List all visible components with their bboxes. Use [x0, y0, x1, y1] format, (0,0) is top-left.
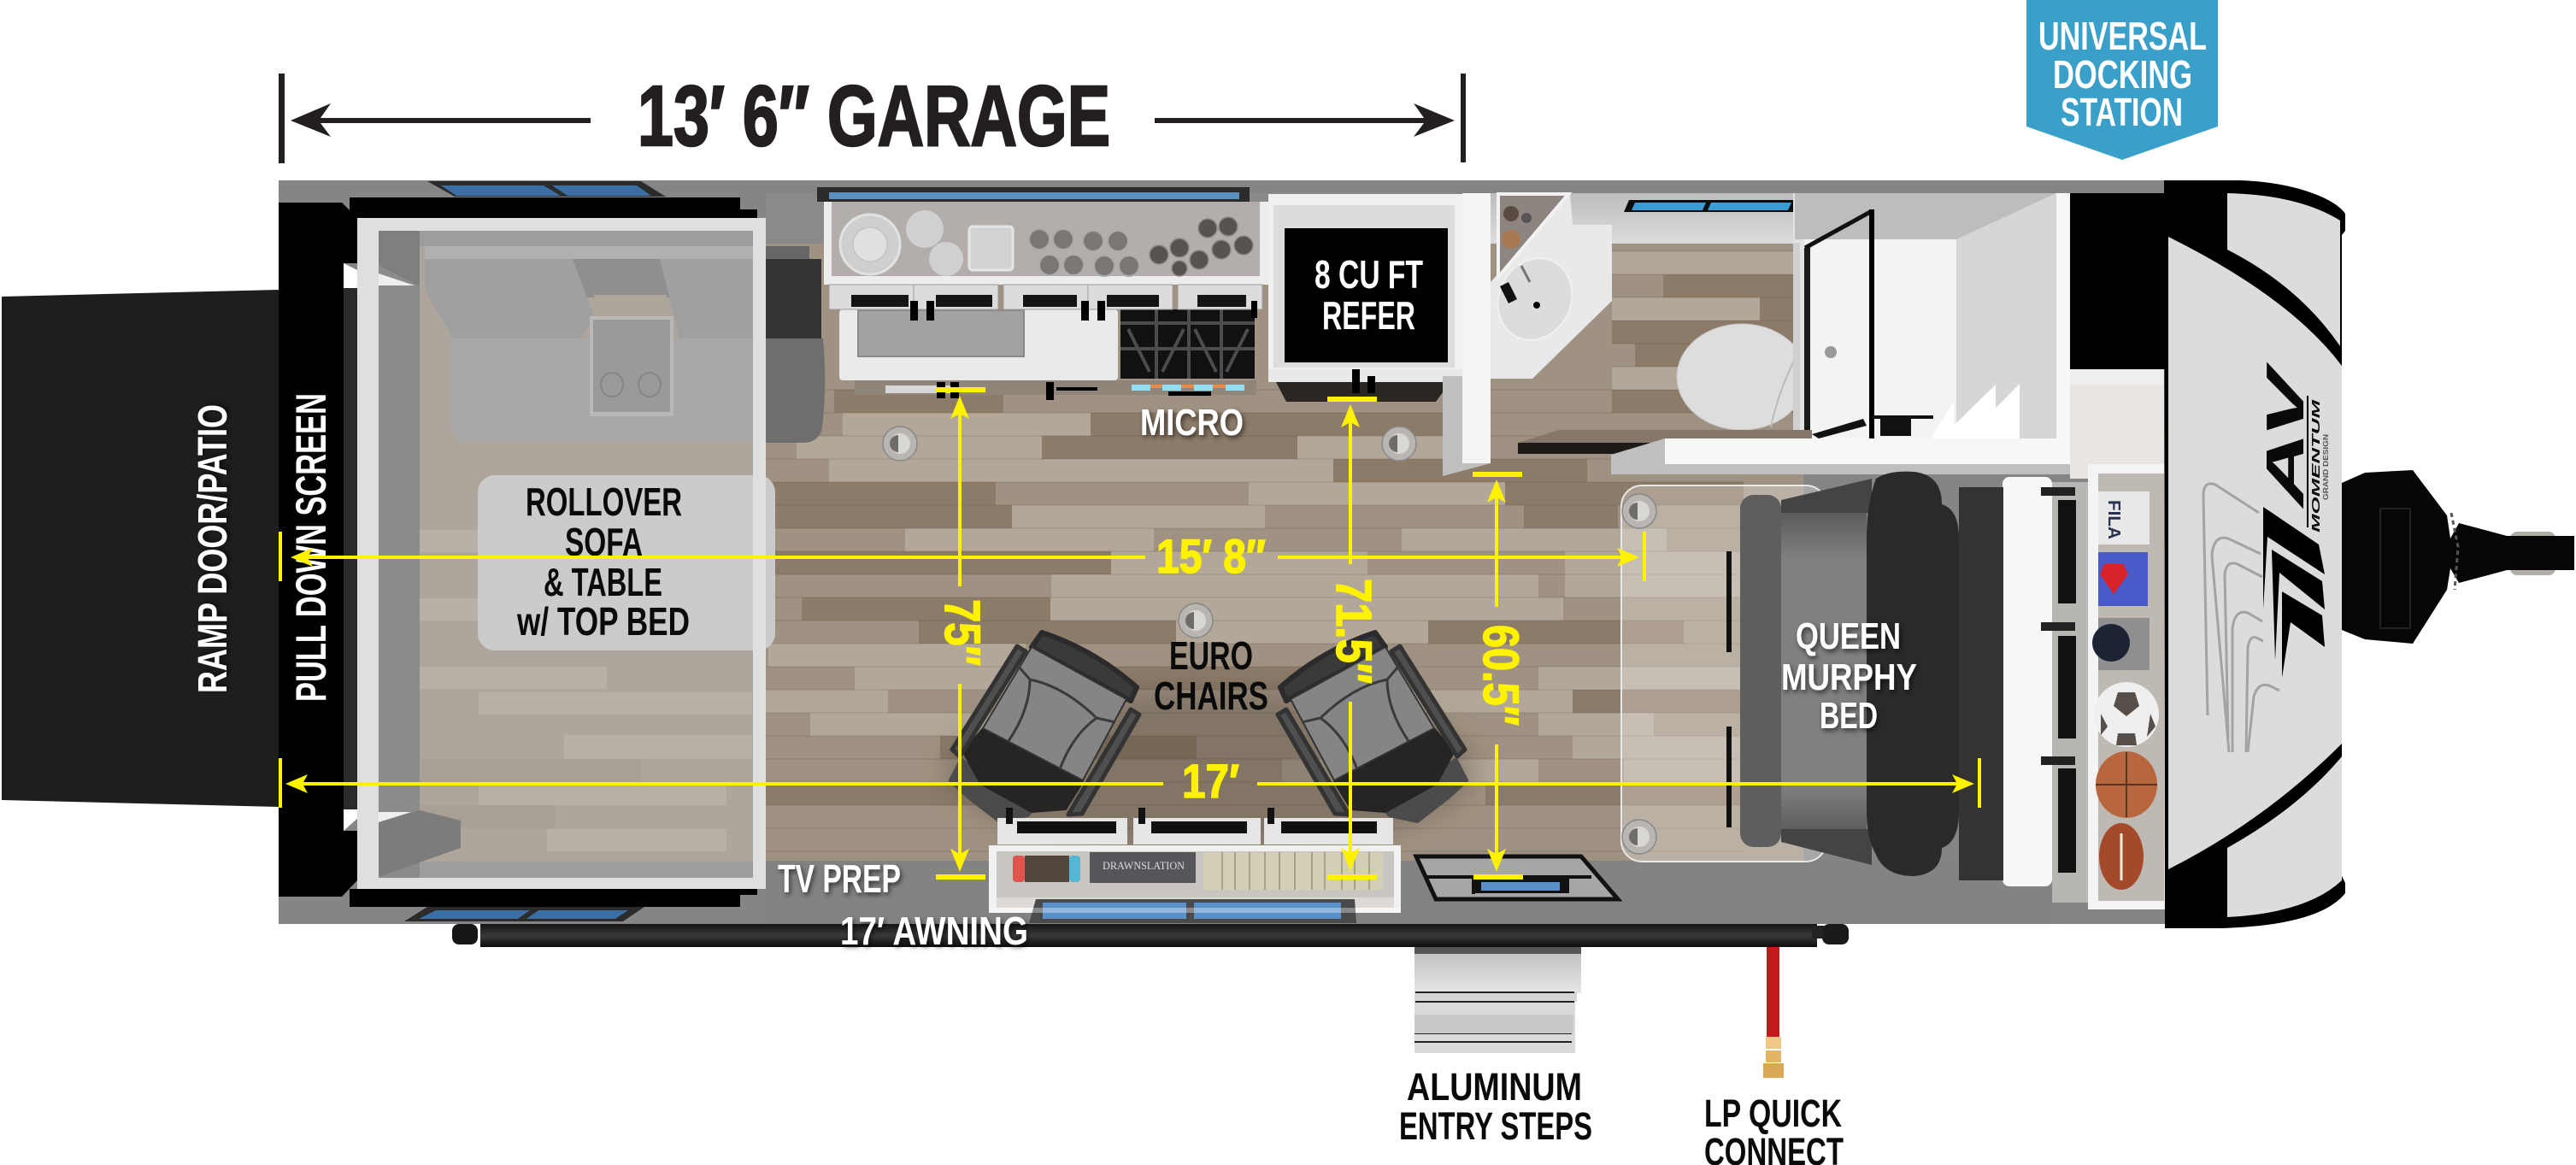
floor shadow under chairs	[946, 688, 1476, 850]
stove	[1120, 309, 1255, 379]
garage right tick	[1461, 74, 1466, 162]
murphy bed label: QUEEN	[1796, 615, 1901, 657]
trailer body shell	[279, 180, 2167, 924]
bathroom skylight	[1624, 200, 1798, 212]
upper wall interior	[766, 193, 2073, 246]
refer label: 8 CU FT	[1314, 252, 1423, 297]
entry mat	[1416, 856, 1618, 899]
toy storage shelf: FILA	[2104, 500, 2123, 539]
refrigerator	[1268, 194, 1467, 402]
dimension 71.5 in: 71.5″	[1326, 579, 1381, 684]
floor rings	[883, 427, 1656, 854]
TV prep label: TV PREP	[778, 856, 901, 901]
bath counter and sink	[1485, 194, 1612, 379]
under counter strip	[855, 380, 1256, 395]
bottom black strip	[350, 889, 757, 907]
rollover sofa label: w/ TOP BED	[516, 599, 690, 644]
trailer front nose	[2164, 180, 2345, 928]
bathroom wall	[1443, 193, 1491, 476]
awning label: 17′ AWNING	[840, 909, 1028, 953]
stove knobs	[1132, 385, 1244, 391]
rollover sofa label: & TABLE	[544, 560, 662, 604]
dimension 15 ft 8 in	[280, 529, 1644, 583]
euro chairs label: CHAIRS	[1154, 674, 1268, 718]
refer label: REFER	[1322, 293, 1415, 338]
murphy bed label: BED	[1820, 695, 1878, 737]
garage right arrow	[1155, 103, 1455, 137]
ramp door patio	[2, 290, 279, 807]
micro label: MICRO	[1140, 402, 1244, 444]
queen murphy bed	[1726, 472, 2088, 903]
front storage wall	[2070, 193, 2168, 479]
kitchen cabinet doors	[829, 285, 1262, 400]
momentum wordmark: MOMENTUM	[2309, 398, 2322, 532]
universal docking station callout: UNIVERSAL	[2038, 14, 2207, 58]
toy storage shelf	[2088, 464, 2167, 909]
nose logo divider	[2307, 396, 2308, 527]
entry steps label: ALUMINUM	[1407, 1065, 1582, 1109]
ramp door label: RAMP DOOR/PATIO	[191, 404, 236, 693]
bottom garage window	[404, 907, 644, 921]
TV prep cabinet	[989, 808, 1401, 913]
rollover label panel	[478, 475, 775, 650]
dimension 15 ft 8 in: 15′ 8″	[1156, 529, 1266, 583]
euro chairs	[951, 633, 1466, 821]
bottom walkway wall	[766, 861, 2056, 924]
kitchen window	[817, 187, 1250, 202]
TV prep window	[989, 899, 1401, 923]
overhead kitchen cabinet	[824, 202, 1273, 285]
entry steps label: ENTRY STEPS	[1399, 1104, 1592, 1148]
aluminum entry steps	[1414, 947, 1581, 1053]
dimension 17 ft: 17′	[1182, 754, 1239, 808]
dimension 60.5 in: 60.5″	[1473, 625, 1528, 726]
toilet	[1677, 324, 1807, 430]
awning	[452, 924, 1849, 947]
top garage window	[427, 181, 666, 197]
universal docking station callout: STATION	[2061, 90, 2183, 134]
dimension 75 in: 75″	[934, 599, 990, 666]
kitchen sink	[858, 310, 1024, 356]
wood floor	[402, 244, 1803, 861]
bathroom upper wall	[1491, 193, 1795, 244]
garage interior	[379, 231, 753, 878]
nose gray chevron lines	[2203, 484, 2279, 752]
TV prep cabinet: DRAWNSLATION	[1103, 859, 1185, 872]
LP hose and fitting	[1763, 947, 1784, 1078]
garage width arrow left tick	[279, 74, 285, 163]
dimension 71.5 in	[1326, 399, 1381, 877]
murphy bed overlay	[1621, 485, 1826, 862]
universal docking station callout: DOCKING	[2053, 52, 2192, 97]
murphy bed label	[1781, 615, 1917, 737]
dimension 17 ft	[280, 754, 1979, 808]
rollover sofa	[425, 246, 825, 443]
pull down screen label: PULL DOWN SCREEN	[287, 393, 335, 702]
garage left end black wall	[279, 203, 368, 897]
garage left arrow	[291, 103, 591, 137]
kitchen counter	[839, 309, 1118, 380]
title: 13′ 6″ GARAGE	[638, 68, 1110, 164]
LP quick connect label: LP QUICK	[1704, 1091, 1842, 1135]
rollover sofa label: SOFA	[565, 520, 643, 564]
rollover sofa label	[516, 480, 690, 644]
universal docking station callout	[2026, 0, 2218, 160]
bathroom shelf	[1518, 430, 2070, 474]
dimension 60.5 in	[1473, 474, 1528, 877]
euro chairs label: EURO	[1169, 633, 1253, 678]
shower	[1793, 193, 2070, 438]
top black strip	[350, 197, 757, 218]
hitch	[2342, 470, 2574, 644]
rollover sofa label: ROLLOVER	[526, 480, 682, 524]
murphy bed label: MURPHY	[1781, 656, 1917, 698]
refer label	[1314, 252, 1423, 338]
nose logo letters: AV	[2256, 362, 2315, 510]
grand design wordmark: GRAND DESIGN	[2322, 434, 2330, 500]
dimension 75 in	[934, 390, 990, 877]
entry steps label	[1399, 1065, 1592, 1148]
euro chairs label	[1154, 633, 1268, 718]
garage screen frame	[357, 218, 766, 889]
nose logo chevrons	[2263, 507, 2325, 678]
LP quick connect label	[1704, 1091, 1844, 1165]
